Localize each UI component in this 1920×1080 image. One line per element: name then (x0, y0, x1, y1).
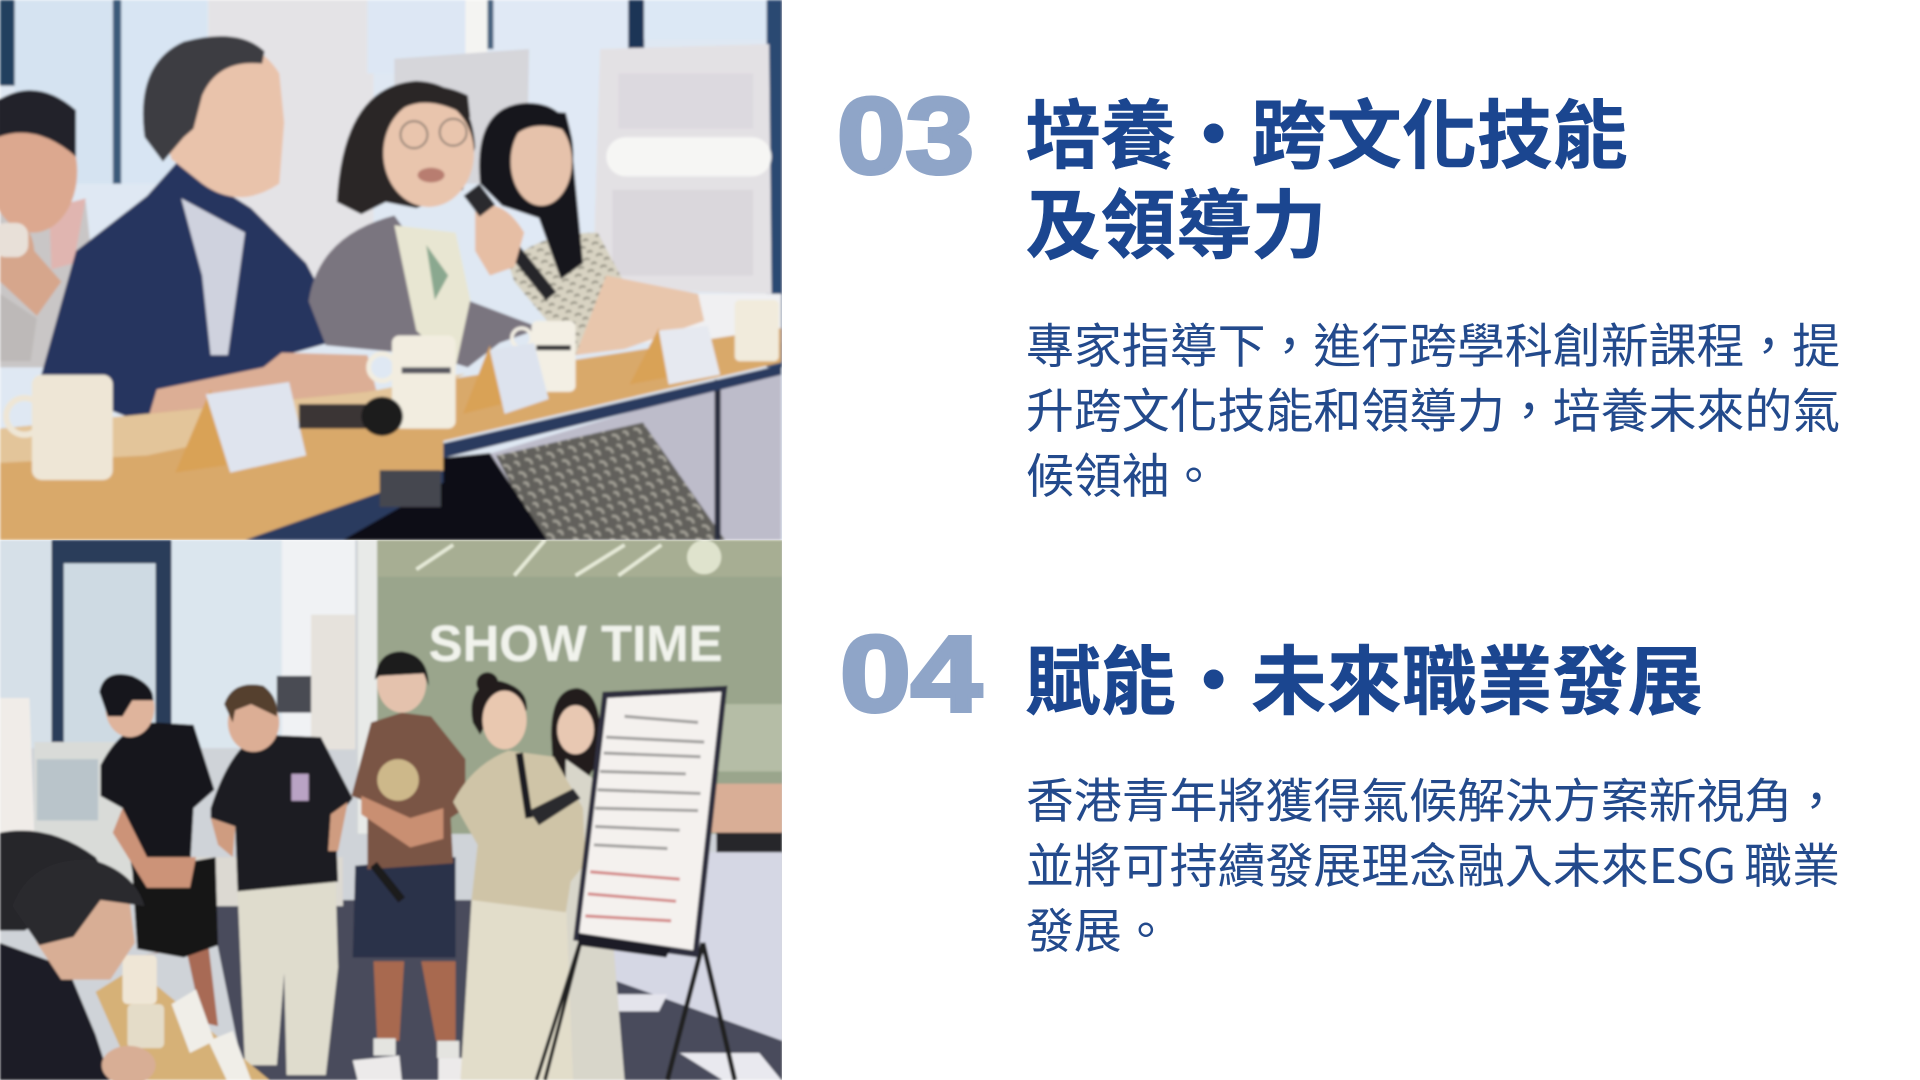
person: man in navy blazer (39, 36, 380, 424)
person: student in black tee (99, 674, 218, 1026)
photo: students presenting at flipchart (0, 540, 782, 1080)
person: student in navy tee and cream trousers (211, 684, 353, 1075)
body text: section 03: 候領袖。 (1026, 437, 1218, 507)
name tents (175, 326, 720, 473)
person: student at far left (0, 90, 96, 367)
lower floor and legs (269, 367, 781, 540)
projection screen: SHOW TIME (429, 614, 723, 672)
person: foreground attendee in dark clothes (0, 830, 269, 1080)
body text: section 04: 並將可持續發展理念融入未來ESG 職業 (1026, 827, 1840, 897)
body text: section 04 (1026, 762, 1840, 962)
heading: section 04: 賦能・未來職業發展 (1026, 621, 1703, 730)
projection screen (358, 540, 783, 855)
mugs (6, 300, 779, 480)
body text: section 03: 升跨文化技能和領導力，培養未來的氣 (1026, 372, 1840, 442)
heading: section 03: 及領導力 (1026, 165, 1327, 274)
microphone on table (299, 397, 403, 436)
person: speaking woman with microphone (309, 81, 551, 367)
table (0, 328, 781, 540)
person: presenter with microphone (453, 672, 585, 1080)
flipchart (536, 686, 735, 1080)
heading: section 03 (1026, 75, 1628, 274)
body text: section 03 (1026, 307, 1840, 507)
number 03: 03 (837, 75, 974, 196)
heading: section 03: 培養・跨文化技能 (1026, 75, 1628, 184)
person: student in brown tee (352, 651, 465, 1080)
body text: section 04: 發展。 (1026, 892, 1170, 962)
body text: section 03: 專家指導下，進行跨學科創新課程，提 (1026, 307, 1840, 377)
number 04: 04 (840, 613, 982, 734)
photo: expert panel at table (0, 0, 782, 540)
floor (208, 900, 783, 1080)
person: woman with long black hair (479, 103, 704, 355)
body text: section 04: 香港青年將獲得氣候解決方案新視角， (1026, 762, 1840, 832)
person: woman behind flipchart (551, 688, 625, 1080)
